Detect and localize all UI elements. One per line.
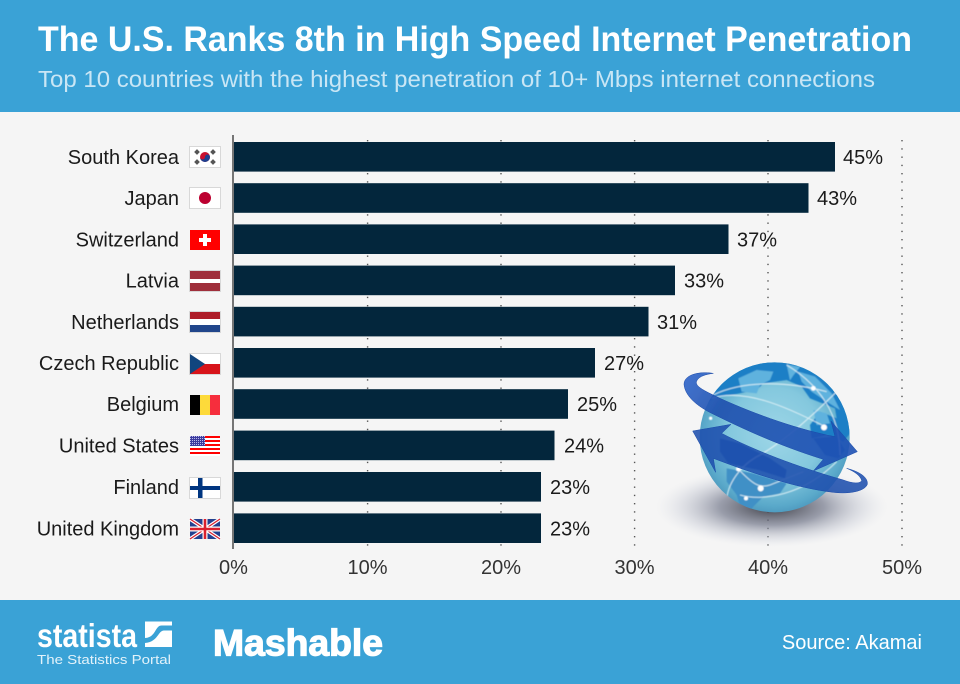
country labels xyxy=(37,147,180,540)
country labels: Switzerland xyxy=(76,229,179,251)
icon: flag Finland xyxy=(190,478,220,498)
x axis labels: 30% xyxy=(614,557,655,579)
country labels: Finland xyxy=(113,477,179,499)
country labels: Latvia xyxy=(126,271,180,293)
country labels: Japan xyxy=(124,188,179,210)
value labels xyxy=(550,147,883,540)
country labels: United Kingdom xyxy=(37,518,179,540)
value labels: 45% xyxy=(843,147,883,169)
x axis labels: 10% xyxy=(347,557,388,579)
icon: flag South Korea xyxy=(190,146,220,168)
icon: flag Netherlands xyxy=(190,312,220,332)
header band xyxy=(0,0,960,112)
bar chart xyxy=(219,135,922,579)
country labels: South Korea xyxy=(68,147,180,169)
value labels: 25% xyxy=(577,394,617,416)
icon: flag United Kingdom xyxy=(190,519,220,539)
footer band xyxy=(0,600,960,684)
country labels: Netherlands xyxy=(71,312,179,334)
statista mark xyxy=(145,622,172,647)
country labels: Czech Republic xyxy=(39,353,179,375)
title: The U.S. Ranks 8th in High Speed Internet Penetration xyxy=(38,19,912,59)
globe sphere xyxy=(700,362,850,512)
globe shadow xyxy=(656,467,888,547)
x axis labels: 40% xyxy=(748,557,788,579)
value labels: 24% xyxy=(564,436,604,458)
value labels: 33% xyxy=(684,271,724,293)
value labels: 23% xyxy=(550,518,590,540)
icon: flag Czech Republic xyxy=(190,354,220,374)
value labels: 27% xyxy=(604,353,644,375)
x axis labels xyxy=(219,557,922,579)
country labels: United States xyxy=(59,436,179,458)
value labels: 31% xyxy=(657,312,697,334)
value labels: 37% xyxy=(737,229,777,251)
x axis labels: 0% xyxy=(219,557,248,579)
icon: flag Latvia xyxy=(190,270,220,292)
x axis labels: 20% xyxy=(481,557,521,579)
country labels: Belgium xyxy=(107,394,179,416)
icon: flag Switzerland xyxy=(190,230,220,250)
value labels: 43% xyxy=(817,188,857,210)
bars xyxy=(234,142,835,543)
icon: globe with arrows xyxy=(669,362,874,546)
ring arrow lower xyxy=(693,424,867,493)
y axis line xyxy=(232,135,234,549)
icon: flag Belgium xyxy=(190,395,220,415)
logo: statista xyxy=(37,617,172,667)
continents xyxy=(703,362,852,513)
x axis labels: 50% xyxy=(882,557,922,579)
ring arrow upper xyxy=(684,373,857,471)
logo: statista: statista xyxy=(37,617,138,654)
icon: flag United States xyxy=(190,436,220,456)
value labels: 23% xyxy=(550,477,590,499)
subtitle: Top 10 countries with the highest penetration of 10+ Mbps internet connections xyxy=(38,66,875,92)
icon: flag Japan xyxy=(190,188,220,208)
source: Source: Akamai xyxy=(782,632,922,654)
logo: Mashable: Mashable xyxy=(213,622,383,664)
statista tagline: The Statistics Portal xyxy=(37,652,171,667)
